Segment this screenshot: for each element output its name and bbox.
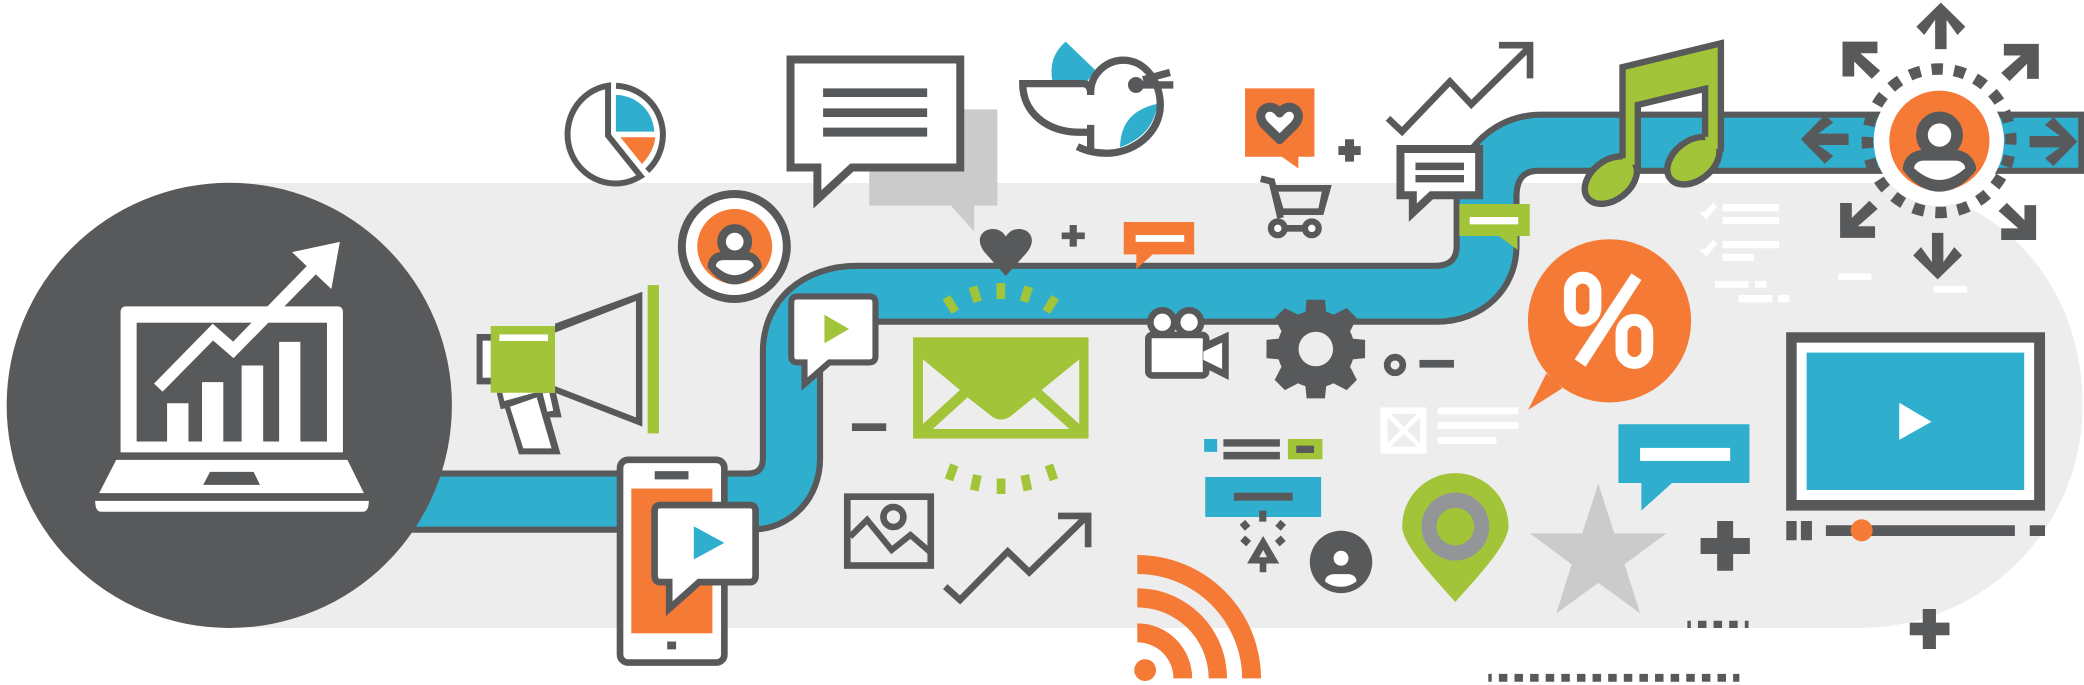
gray back bubble — [869, 109, 997, 232]
icon: map pin — [1402, 473, 1509, 602]
icon: growth arrow bottom — [945, 515, 1088, 600]
icon: gear — [1266, 300, 1365, 398]
white checklist — [1699, 203, 1967, 302]
icon: dash — [852, 423, 886, 431]
icon: laptop screen — [121, 306, 343, 452]
icon: rss feed — [1134, 555, 1261, 681]
person in orange circle — [1889, 91, 1989, 192]
big chat bubble — [791, 60, 960, 199]
icon: heart — [980, 229, 1032, 276]
icon: phone — [620, 460, 756, 663]
small circle and dash — [1387, 357, 1454, 373]
plus — [1062, 225, 1085, 247]
screen interior — [137, 323, 327, 442]
icon: person badge — [682, 194, 787, 299]
icon: movie camera — [1148, 310, 1229, 380]
dotted line long — [1488, 675, 1739, 681]
pipe — [399, 115, 2081, 530]
phone chat bubble — [655, 505, 756, 609]
background band — [229, 183, 2083, 628]
plus large — [1701, 521, 1750, 571]
laptop circle — [7, 183, 452, 628]
laptop base — [99, 460, 364, 493]
chat bubble on pipe — [1400, 149, 1479, 213]
icon: image — [847, 497, 931, 566]
blue bubble — [1618, 424, 1749, 511]
icon: growth arrow top — [1388, 45, 1530, 132]
plus bottom right — [1910, 609, 1949, 649]
blue button with cursor — [1205, 477, 1321, 572]
person with arrows: halo — [1874, 76, 2004, 206]
arrow right — [2030, 117, 2077, 166]
video controls — [1786, 519, 2045, 541]
arrow up-right — [2001, 44, 2039, 81]
legend row — [1204, 439, 1322, 459]
arrow up-left — [1842, 42, 1880, 79]
icon: white document — [1380, 407, 1518, 454]
orange small bubble — [1124, 222, 1194, 269]
green bubble — [1459, 204, 1530, 250]
arrow down — [1913, 233, 1962, 279]
arrow down-left — [1840, 201, 1878, 238]
bar chart — [167, 342, 300, 442]
icon: video monitor — [1786, 332, 2045, 511]
icon: pie chart — [568, 86, 663, 183]
arrow left — [1801, 115, 1849, 164]
icon: megaphone — [477, 285, 659, 454]
icon: dark person — [1310, 531, 1372, 593]
green signal dashes bottom — [949, 465, 1054, 494]
icon: orange heart bubble — [1245, 88, 1314, 168]
icon: envelope — [913, 337, 1089, 439]
arrow up — [1916, 3, 1965, 49]
plus — [1338, 139, 1361, 162]
play bubble — [791, 296, 875, 384]
laptop foot — [95, 501, 369, 512]
icon: bird — [1023, 42, 1173, 153]
arrow down-right — [1999, 203, 2036, 240]
dashed ring — [1860, 62, 2018, 220]
icon: shopping cart — [1261, 179, 1332, 235]
green signal dashes top — [946, 283, 1055, 312]
icon: percent bubble — [1528, 239, 1691, 410]
dotted line short — [1687, 622, 1749, 627]
growth arrow — [154, 242, 340, 392]
icon: music note — [1576, 43, 1729, 214]
icon: star — [1530, 484, 1666, 613]
